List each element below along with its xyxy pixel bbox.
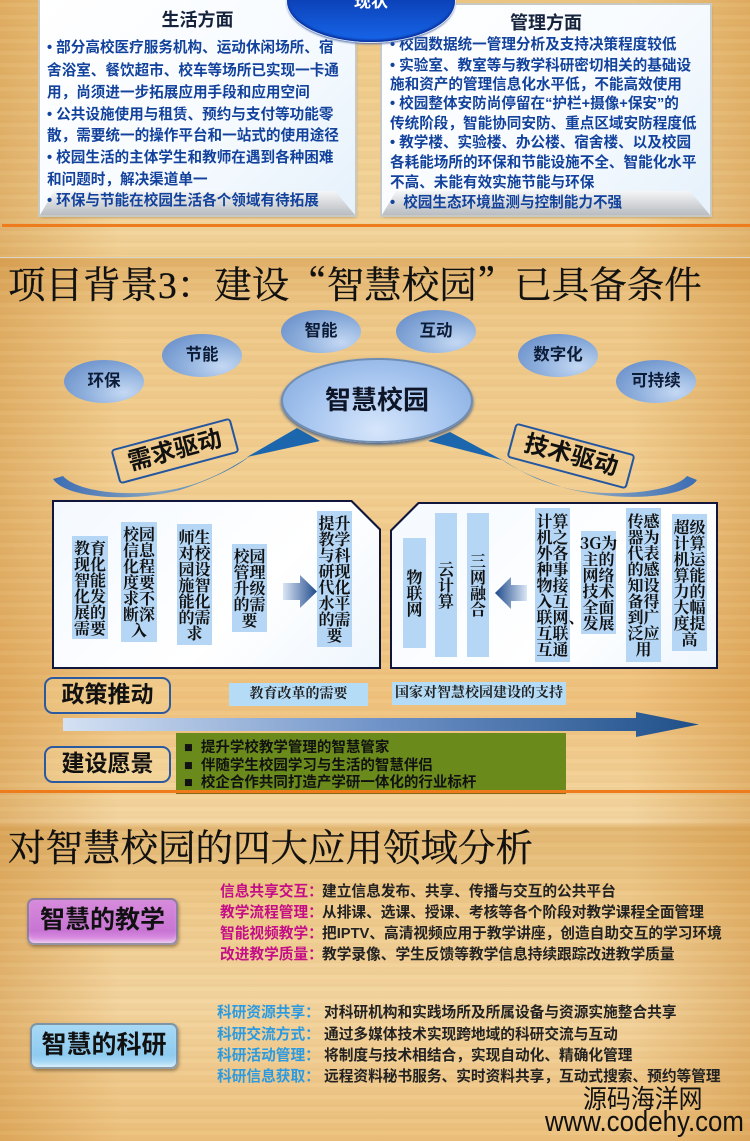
column: sensors: 器为 xyxy=(627,525,660,548)
title: four application areas: 对智慧校园的四大应用领域分析 xyxy=(8,818,533,872)
column: sensors: 知设 xyxy=(627,573,660,596)
column: things connected: 机之 xyxy=(536,525,568,548)
footer site name: 源码海洋网 xyxy=(583,1084,703,1114)
tag: national support xyxy=(392,682,566,705)
row 3: 智能视频教学： xyxy=(220,926,323,942)
bubble: digital xyxy=(518,334,598,377)
text: life aspect bullets: 舍浴室、餐饮超市、校车等场所已实现一卡通 xyxy=(47,63,339,79)
button: smart teaching xyxy=(27,898,178,945)
column: informatisation level: 入 xyxy=(131,618,147,641)
column: things connected: 入互 xyxy=(536,589,568,612)
panel: vision list xyxy=(176,733,566,794)
title: section background 3: 项目背景3：建设“智慧校园”已具备条件 xyxy=(8,255,702,309)
column: management upgrade: 管理 xyxy=(233,560,266,583)
column: things connected: 互通 xyxy=(536,637,568,660)
column: internet of things xyxy=(403,538,426,648)
column: education modernisation: 化发 xyxy=(74,584,106,606)
panel: life aspect xyxy=(40,0,355,215)
row 3 xyxy=(217,1047,632,1064)
row 3: 把IPTV、高清视频应用于教学讲座，创造自助交互的学习环境 xyxy=(322,926,722,942)
column: education modernisation: 展的 xyxy=(74,600,106,622)
column: management upgrade xyxy=(232,544,267,632)
label: technology driven: 技术驱动 xyxy=(521,430,621,481)
column: triple network: 三 xyxy=(470,549,486,572)
column: teachers and students need: 施智 xyxy=(178,572,210,596)
text: management aspect bullets: 传统阶段，智能协同安防、重点区域安防程度低 xyxy=(390,116,696,132)
bubble: intelligent: 智能 xyxy=(304,322,338,340)
panel interior xyxy=(392,504,716,667)
arrow: right block arrow xyxy=(283,575,317,608)
center ellipse: smart campus xyxy=(281,358,473,443)
text: life aspect bullets: 散，需要统一的操作平台和一站式的使用途径 xyxy=(47,128,339,144)
column: triple network xyxy=(467,513,489,657)
column: things connected: 外各 xyxy=(536,541,568,564)
list: smart research xyxy=(217,1004,721,1085)
text: management aspect bullets: • 校园生态环境监测与控制能力不强 xyxy=(390,195,622,211)
footer site url: www.codehy.com xyxy=(545,1106,744,1138)
column: 3G network: 3G为 xyxy=(580,530,617,554)
arrow: left block arrow xyxy=(495,577,527,609)
text: life aspect bullets: 和问题时，解决渠道单一 xyxy=(47,172,208,188)
column: teachers and students need: 能化 xyxy=(178,588,210,612)
panel bottom bevel xyxy=(382,191,710,215)
bubble: sustainable xyxy=(616,360,696,403)
column: supercomputing: 大幅 xyxy=(673,594,706,618)
column: supercomputing: 超级 xyxy=(673,514,706,538)
column: modernisation of teaching: 教学 xyxy=(318,527,350,550)
bubble: sustainable: 可持续 xyxy=(631,372,681,390)
column: triple network: 网 xyxy=(470,565,486,588)
row 1: 对科研机构和实践场所及所属设备与资源实施整合共享 xyxy=(324,1005,677,1021)
column: internet of things: 联 xyxy=(406,581,422,604)
column: teachers and students need: 对校 xyxy=(178,540,210,564)
column: triple network: 融 xyxy=(470,581,486,604)
column: informatisation level: 度要 xyxy=(123,570,155,593)
column: supercomputing: 算能 xyxy=(673,562,706,586)
arrow: demand curve xyxy=(53,428,320,498)
column: modernisation of teaching xyxy=(317,511,352,647)
label: technology driven xyxy=(506,423,636,489)
column: informatisation level: 断深 xyxy=(123,602,155,625)
row 4: 科研信息获取： xyxy=(217,1069,320,1085)
heading: management aspect: 管理方面 xyxy=(510,13,582,33)
label: policy driven xyxy=(44,677,171,714)
tag: national support: 国家对智慧校园建设的支持 xyxy=(395,686,563,701)
list: smart teaching xyxy=(220,883,722,963)
bubble: interactive: 互动 xyxy=(420,322,452,340)
column: education modernisation: 现化 xyxy=(74,552,106,574)
column: things connected: 联网、 xyxy=(536,605,584,628)
column: supercomputing: 计算 xyxy=(673,530,706,554)
row 2: 从排课、选课、授课、考核等各个阶段对教学课程全面管理 xyxy=(322,905,704,921)
text: management aspect bullets xyxy=(390,36,696,211)
row 4: 远程资料秘书服务、实时资料共享，互动式搜索、预约等管理 xyxy=(324,1069,721,1085)
column: teachers and students need: 师生 xyxy=(178,524,210,548)
button: smart research: 智慧的科研 xyxy=(41,1031,166,1059)
text: management aspect bullets: • 教学楼、实验楼、办公楼、宿舍楼、以及校园 xyxy=(390,135,691,151)
button: smart teaching: 智慧的教学 xyxy=(40,906,165,934)
column: modernisation of teaching: 与科 xyxy=(318,543,350,566)
text: management aspect bullets: 各耗能场所的环保和节能设施不全、智能化水平 xyxy=(390,155,696,171)
column: cloud computing: 计 xyxy=(438,573,454,596)
column: sensors: 代表 xyxy=(627,541,660,564)
column: education modernisation: 需要 xyxy=(74,616,106,638)
vision item 3: ■ 校企合作共同打造产学研一体化的行业标杆 xyxy=(184,775,476,791)
column: internet of things: 物 xyxy=(406,565,422,588)
column: modernisation of teaching: 的需 xyxy=(318,607,350,630)
column: informatisation level: 化程 xyxy=(123,554,155,577)
panel: management aspect xyxy=(382,5,710,215)
column: modernisation of teaching: 代化 xyxy=(318,575,350,598)
row 4: 教学录像、学生反馈等教学信息持续跟踪改进教学质量 xyxy=(322,947,675,963)
row 3: 将制度与技术相结合，实现自动化、精确化管理 xyxy=(324,1048,632,1064)
column: management upgrade: 校园 xyxy=(233,544,266,567)
column: management upgrade: 要 xyxy=(241,608,258,631)
column: 3G network: 网络 xyxy=(582,562,615,586)
panel interior xyxy=(54,502,379,667)
column: modernisation of teaching: 要 xyxy=(326,623,342,646)
column: 3G network: 技术 xyxy=(582,578,615,602)
bubble: interactive xyxy=(396,310,476,353)
panel: demand factors xyxy=(52,500,381,669)
bubble: intelligent xyxy=(281,310,361,353)
vision item 2: ■ 伴随学生校园学习与生活的智慧伴侣 xyxy=(184,758,433,774)
column: teachers and students need: 的需 xyxy=(178,604,210,628)
column: supercomputing: 高 xyxy=(681,626,698,650)
column: 3G network: 发展 xyxy=(582,610,615,634)
column: triple network: 合 xyxy=(470,597,486,620)
tag: education reform need xyxy=(229,683,368,706)
column: sensors: 的感 xyxy=(627,557,660,580)
column: things connected: 物接 xyxy=(536,573,568,596)
column: management upgrade: 升级 xyxy=(233,576,266,599)
row 2: 通过多媒体技术实现跨地域的科研交流与互动 xyxy=(324,1027,618,1043)
row 1: 信息共享交互： xyxy=(220,884,323,900)
column: cloud computing xyxy=(435,513,457,657)
column: informatisation level xyxy=(121,522,157,642)
row 1: 科研资源共享： xyxy=(217,1005,320,1021)
text: life aspect bullets xyxy=(47,39,339,209)
text: life aspect bullets: • 环保与节能在校园生活各个领域有待拓展 xyxy=(47,193,319,209)
column: things connected xyxy=(535,508,570,662)
column: 3G network xyxy=(581,531,616,634)
column: things connected: 计算 xyxy=(536,509,568,532)
row 3: 科研活动管理： xyxy=(217,1048,320,1064)
column: teachers and students need: 园设 xyxy=(178,556,210,580)
row 1: 建立信息发布、共享、传播与交互的公共平台 xyxy=(322,884,616,900)
row 1 xyxy=(220,883,616,900)
column: things connected: 互联 xyxy=(536,621,568,644)
label: demand driven xyxy=(110,418,240,484)
text: life aspect bullets: • 部分高校医疗服务机构、运动休闲场所、宿 xyxy=(47,40,333,56)
row 4: 改进教学质量： xyxy=(220,947,323,963)
text: management aspect bullets: 不高、未能有效实施节能与环保 xyxy=(390,175,594,191)
column: modernisation of teaching: 水平 xyxy=(318,591,350,614)
column: supercomputing: 机运 xyxy=(673,546,706,570)
text: life aspect bullets: • 校园生活的主体学生和教师在遇到各种困难 xyxy=(47,150,333,166)
label: construction vision xyxy=(44,746,171,783)
column: cloud computing: 算 xyxy=(438,589,454,612)
button: smart research xyxy=(30,1023,178,1069)
column: things connected: 种事 xyxy=(536,557,568,580)
arrow: technology curve xyxy=(428,432,697,497)
row 2 xyxy=(217,1026,618,1043)
column: supercomputing xyxy=(672,514,707,651)
column: teachers and students need: 求 xyxy=(186,620,202,644)
badge: current status xyxy=(287,0,455,42)
column: 3G network: 主的 xyxy=(582,546,615,570)
heading: life aspect: 生活方面 xyxy=(162,10,234,30)
column: education modernisation: 教育 xyxy=(74,536,106,558)
bubble: environmental: 环保 xyxy=(88,372,120,390)
column: teachers and students need xyxy=(177,524,212,645)
column: sensors: 泛应 xyxy=(627,621,660,644)
label: demand driven: 需求驱动 xyxy=(125,425,225,476)
column: sensors: 传感 xyxy=(627,509,660,532)
column: informatisation level: 校园 xyxy=(123,522,155,545)
bubble: energy saving xyxy=(162,334,242,377)
text: management aspect bullets: • 校园整体安防尚停留在“护栏+摄像+保安”的 xyxy=(390,96,679,112)
bubble: environmental xyxy=(64,360,144,403)
row 2: 教学流程管理： xyxy=(220,905,323,921)
panel bottom bevel xyxy=(40,191,355,215)
column: supercomputing: 度提 xyxy=(673,610,706,634)
text: management aspect bullets: • 实验室、教室等与教学科研密切相关的基础设 xyxy=(390,58,691,74)
text: management aspect bullets: 施和资产的管理信息化水平低，不能高效使用 xyxy=(390,77,682,93)
arrow: timeline xyxy=(63,712,699,737)
row 2: 科研交流方式： xyxy=(217,1027,320,1043)
vision item 1: ■ 提升学校教学管理的智慧管家 xyxy=(184,740,389,756)
text: management aspect bullets: • 校园数据统一管理分析及支持决策程度较低 xyxy=(390,37,676,53)
bubble: digital: 数字化 xyxy=(533,346,583,364)
column: cloud computing: 云 xyxy=(438,557,454,580)
column: informatisation level: 求不 xyxy=(123,586,155,609)
column: modernisation of teaching: 提升 xyxy=(318,511,350,534)
text: life aspect bullets: 用，尚须进一步拓展应用手段和应用空间 xyxy=(47,85,310,101)
column: management upgrade: 的需 xyxy=(233,592,266,615)
column: supercomputing: 力的 xyxy=(673,578,706,602)
column: modernisation of teaching: 研现 xyxy=(318,559,350,582)
panel: technology factors xyxy=(390,502,718,669)
column: sensors: 备得 xyxy=(627,589,660,612)
center ellipse: smart campus: 智慧校园 xyxy=(325,385,429,415)
tag: education reform need: 教育改革的需要 xyxy=(250,687,348,702)
text: life aspect bullets: • 公共设施使用与租赁、预约与支付等功能零 xyxy=(47,107,333,123)
column: sensors: 用 xyxy=(635,637,652,660)
label: policy driven: 政策推动 xyxy=(62,681,154,707)
bubble: energy saving: 节能 xyxy=(186,346,218,364)
column: education modernisation xyxy=(72,536,108,639)
column: informatisation level: 信息 xyxy=(123,538,155,561)
column: sensors xyxy=(626,508,661,662)
column: 3G network: 全面 xyxy=(582,594,615,618)
label: construction vision: 建设愿景 xyxy=(62,750,154,776)
column: internet of things: 网 xyxy=(406,597,422,620)
column: sensors: 到广 xyxy=(627,605,660,628)
column: education modernisation: 智能 xyxy=(74,568,106,590)
